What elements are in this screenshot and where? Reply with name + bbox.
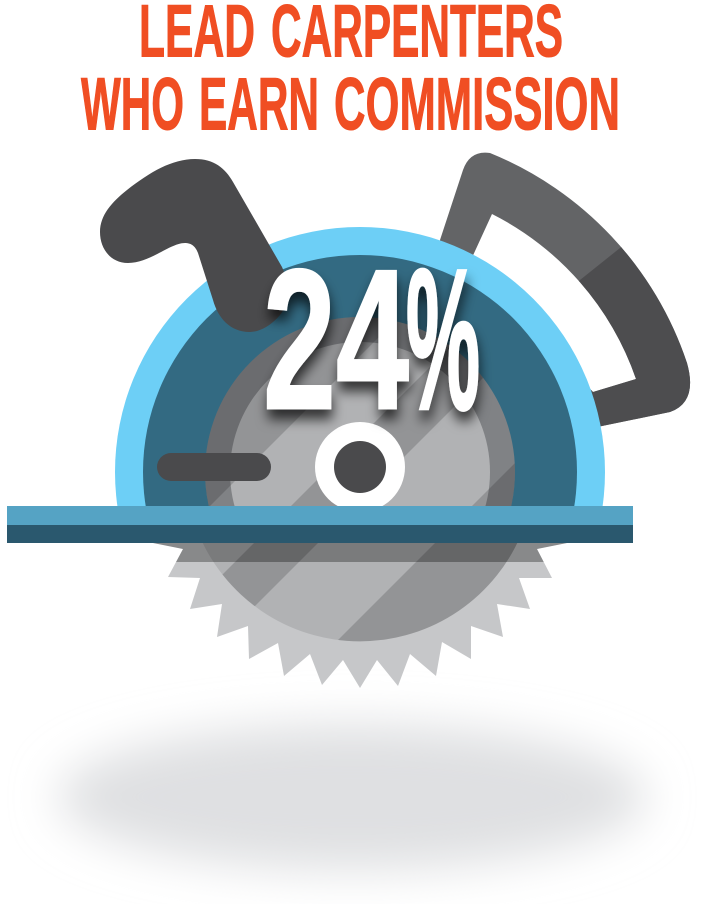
blade guard	[115, 227, 605, 506]
title: WHO	[81, 62, 184, 146]
saw table base	[7, 506, 633, 543]
icon: rear handle	[430, 153, 690, 435]
depth slot	[157, 453, 271, 481]
blade hub	[315, 422, 405, 512]
percentage value: 24	[263, 228, 409, 452]
ground shadow	[58, 724, 646, 870]
table shadow strip	[154, 543, 566, 562]
circular saw illustration	[7, 152, 690, 688]
saw blade disc	[203, 317, 518, 642]
icon: front handle	[100, 159, 288, 332]
title: EARN	[199, 62, 319, 146]
title	[81, 0, 620, 146]
saw teeth	[153, 543, 567, 688]
text: %	[406, 228, 480, 452]
